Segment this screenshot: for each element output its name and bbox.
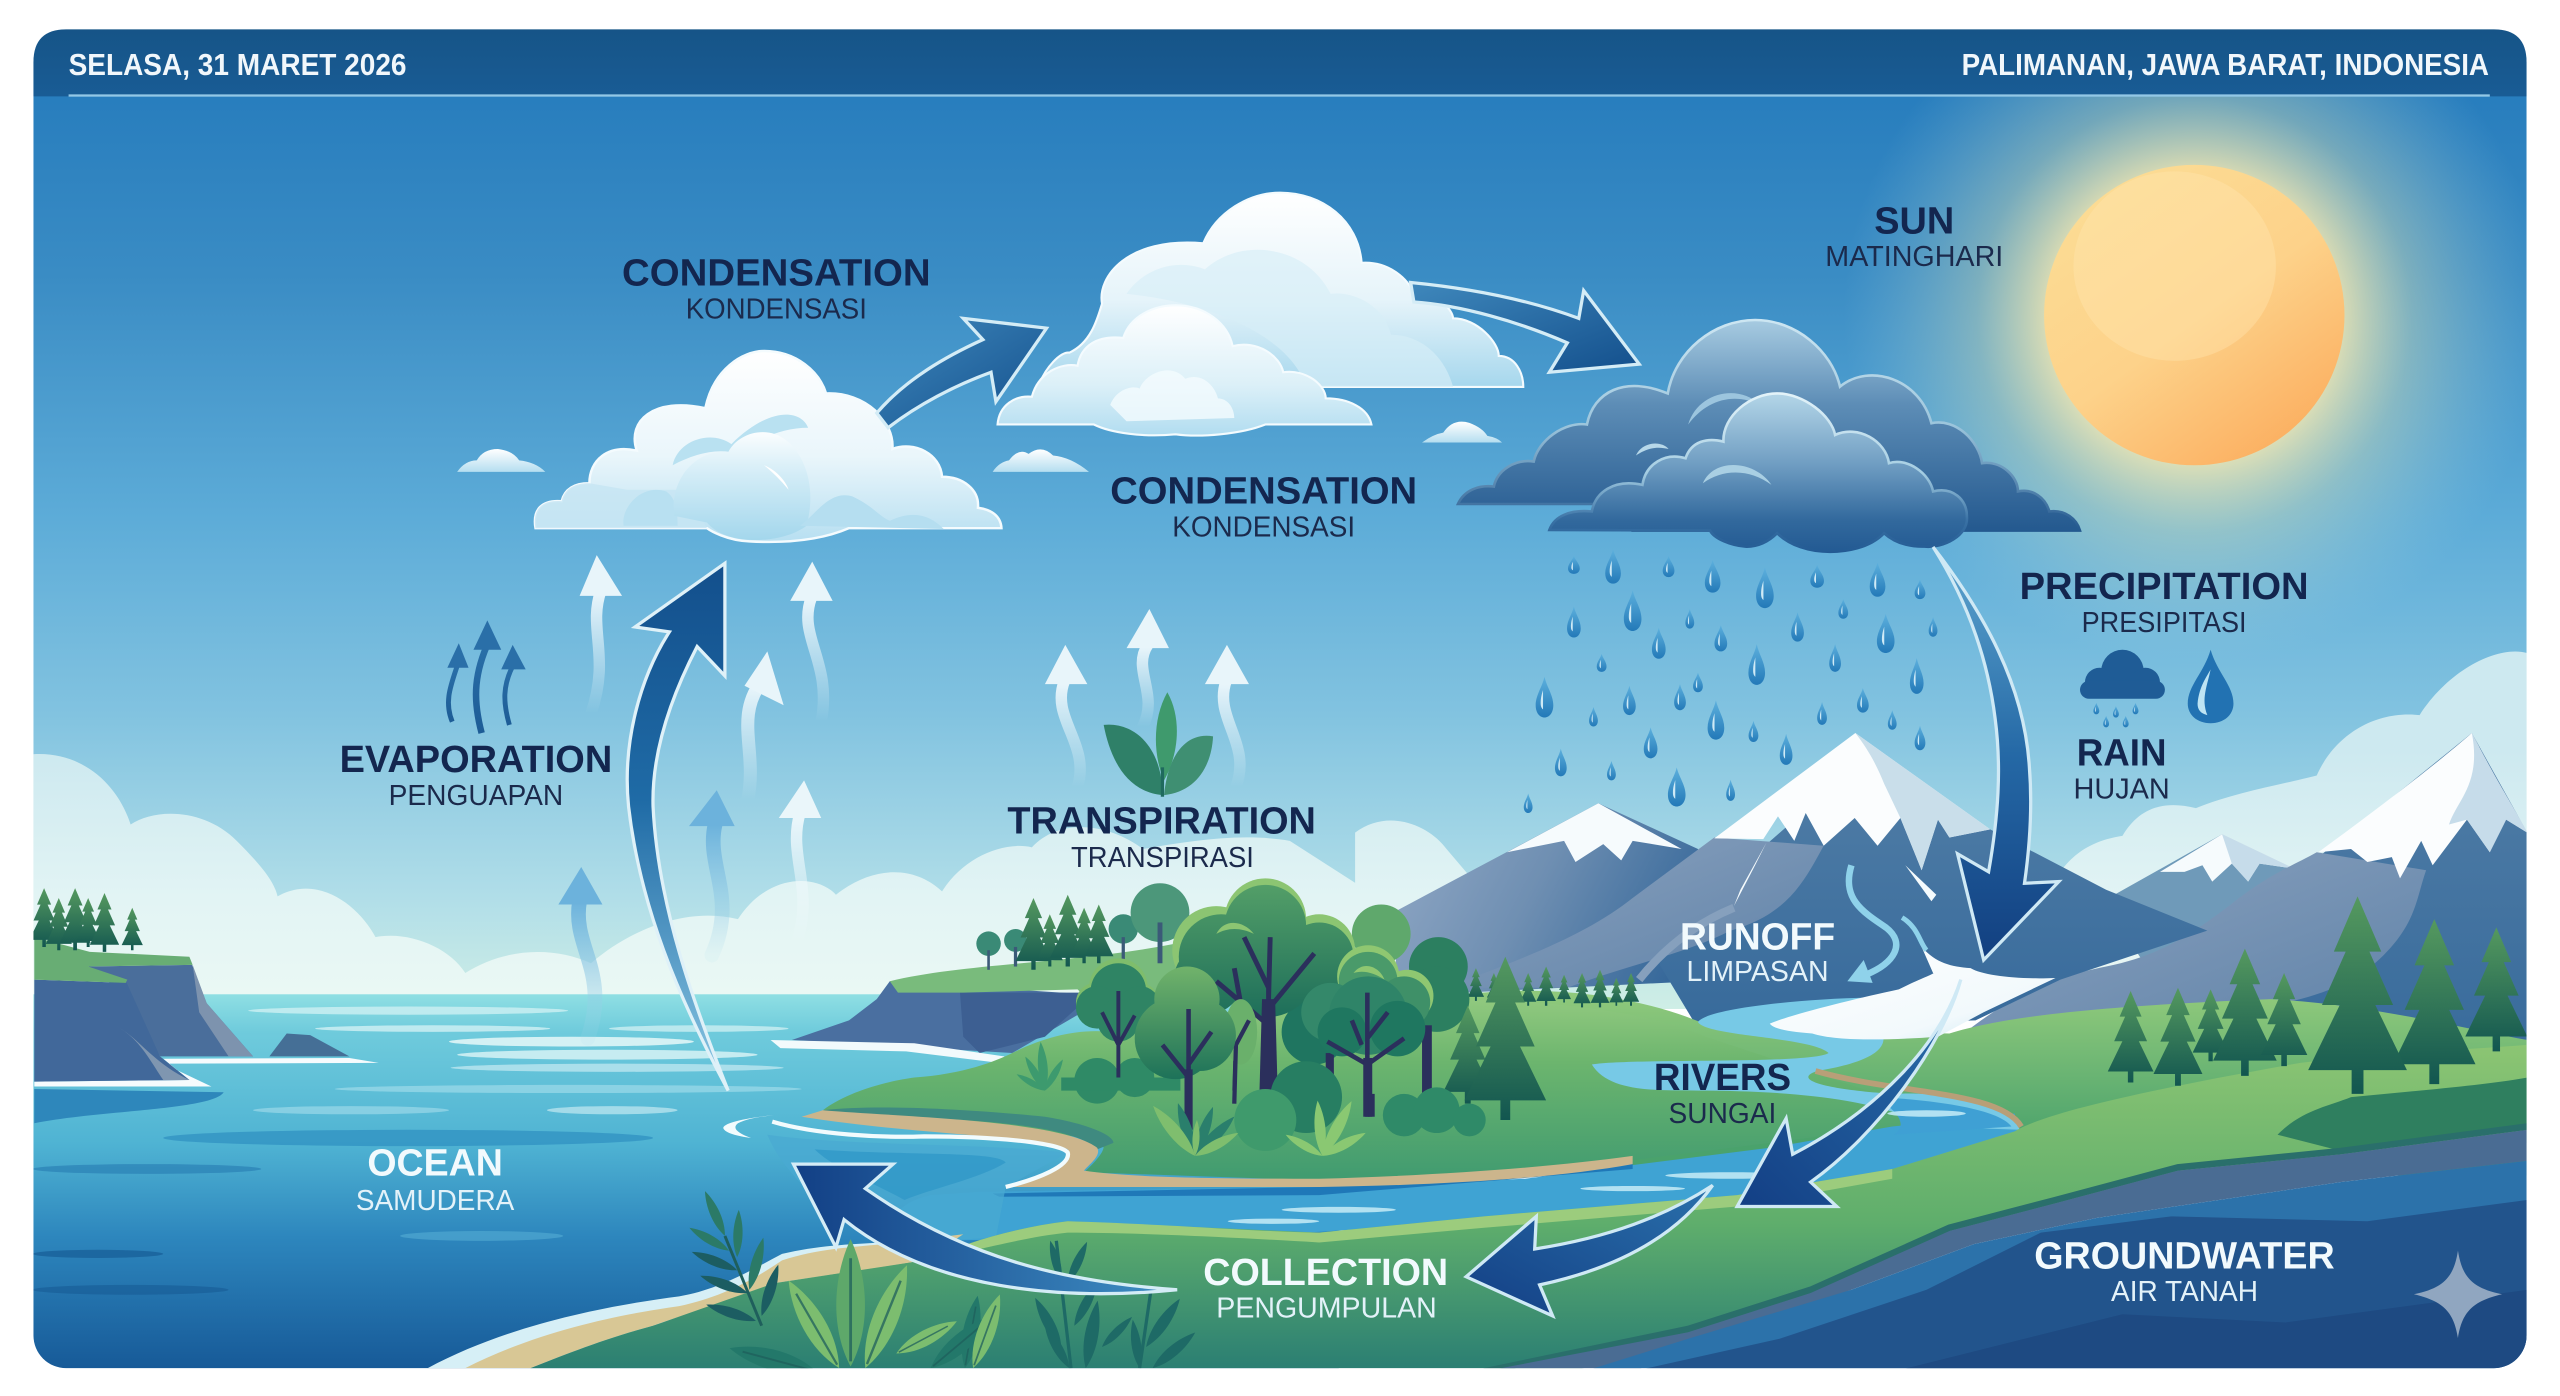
arrow: precipitation <box>1933 547 2059 960</box>
back cloud highlight arc <box>1688 393 1760 424</box>
main tree highlight <box>1216 923 1254 934</box>
label: condensation center: CONDENSATION <box>1110 470 1417 512</box>
river deep curve <box>1878 1097 2011 1135</box>
transpiration wisp right <box>1205 645 1249 787</box>
label: ocean: SAMUDERA <box>356 1184 514 1216</box>
right bottom shade <box>800 495 944 529</box>
small snow cap <box>2160 834 2294 882</box>
mountains <box>1396 733 2527 1078</box>
ocean bay near island <box>768 1135 1006 1210</box>
label: condensation center: KONDENSASI <box>1172 510 1355 542</box>
label: precipitation: PRESIPITASI <box>2082 606 2247 638</box>
left snow cap <box>1507 803 1682 862</box>
foreground sand <box>465 1234 963 1368</box>
small pine row <box>1468 965 1639 1007</box>
label: condensation center <box>1110 470 1417 542</box>
label: rain: RAIN <box>2077 732 2167 774</box>
label: rain: HUJAN <box>2073 772 2170 804</box>
label: rain <box>2073 732 2170 804</box>
icon: water drop <box>2188 650 2233 723</box>
distant clouds on the horizon <box>34 652 2526 994</box>
label: transpiration: TRANSPIRASI <box>1071 841 1254 873</box>
ocean streaks <box>33 1007 802 1295</box>
front puff <box>674 432 810 540</box>
label: evaporation: PENGUAPAN <box>389 779 563 811</box>
label: transpiration: TRANSPIRATION <box>1007 799 1316 841</box>
glacier snowmelt <box>1770 947 2056 1039</box>
sky background <box>33 29 2527 1009</box>
back puff shade <box>673 415 808 465</box>
cloud left white <box>535 351 1001 542</box>
right sprigs <box>1030 1240 1199 1372</box>
back tree canopy <box>1282 904 1469 1064</box>
header date: SELASA, 31 MARET 2026 <box>69 49 407 82</box>
cloud upper front <box>998 305 1371 436</box>
far tree row <box>976 883 1189 970</box>
icon: evaporation arrows <box>447 620 526 733</box>
small cloud right <box>1422 422 1502 442</box>
label: collection <box>1203 1251 1448 1324</box>
decorative sparkle star <box>2414 1251 2502 1338</box>
left bottom shade <box>535 483 707 528</box>
label: rivers: RIVERS <box>1654 1056 1791 1098</box>
evaporation wisp 5 <box>779 780 821 947</box>
label: transpiration <box>1007 799 1316 873</box>
label: groundwater: AIR TANAH <box>2111 1275 2258 1307</box>
bay shade <box>815 1149 1006 1200</box>
sun glow <box>1868 96 2520 624</box>
island bushes back <box>1061 1058 1180 1104</box>
transpiration wisp left <box>1045 645 1087 787</box>
label: precipitation: PRECIPITATION <box>2020 565 2309 607</box>
label: groundwater: GROUNDWATER <box>2034 1235 2335 1277</box>
island land <box>823 1012 1437 1179</box>
right pines <box>2108 896 2527 1094</box>
snow streaks <box>1734 842 1936 906</box>
sun highlight <box>2073 171 2276 361</box>
left sprig <box>687 1189 783 1326</box>
white swirl <box>723 1115 774 1138</box>
front bushes <box>1234 1061 1486 1151</box>
cloud upper back <box>1038 193 1523 387</box>
label: precipitation <box>2020 565 2309 638</box>
far shore grass <box>890 944 1176 993</box>
left cliff grass <box>34 937 193 983</box>
arrow: cloud to rain cloud <box>1411 282 1639 372</box>
arrow: river to collection <box>1466 1185 1713 1316</box>
label: condensation left: KONDENSASI <box>686 292 867 324</box>
label: evaporation <box>340 738 612 811</box>
river upper meander <box>1592 998 2020 1130</box>
evaporation wisp 1 <box>580 555 622 713</box>
arrow: runoff to river <box>1737 980 1961 1207</box>
river dark strip <box>993 1162 1633 1197</box>
left cliff shoreline <box>34 1058 379 1087</box>
dark rain cloud back <box>1458 320 2080 531</box>
foreground light bank <box>924 1169 1892 1260</box>
gray rock layer <box>1484 1130 2527 1371</box>
ocean <box>33 994 1339 1373</box>
fern center <box>1148 1101 1241 1160</box>
main mountain gray ridge left <box>1498 838 1824 988</box>
label: condensation left: CONDENSATION <box>622 252 931 294</box>
label: ocean <box>356 1142 514 1216</box>
label: ocean: OCEAN <box>367 1142 503 1184</box>
evaporation wisp 6 <box>558 867 602 1038</box>
far shore rock <box>792 981 1078 1053</box>
small cloud center <box>993 449 1089 472</box>
label: runoff <box>1680 915 1835 987</box>
sun <box>2044 165 2344 465</box>
header location: PALIMANAN, JAWA BARAT, INDONESIA <box>1962 49 2489 82</box>
icon: rain cloud <box>2080 650 2165 727</box>
left tree <box>1076 958 1161 1078</box>
sand along island <box>802 1110 1633 1187</box>
foreground land <box>531 1045 2527 1371</box>
island ferns <box>1015 1041 1368 1160</box>
label: groundwater <box>2034 1235 2335 1307</box>
rising wisps <box>558 555 1249 1038</box>
label: rivers <box>1654 1056 1791 1129</box>
label: runoff: RUNOFF <box>1680 915 1835 957</box>
fern right <box>1284 1098 1368 1160</box>
far right mountain gray ridge <box>1959 852 2426 1037</box>
arrow: evaporation upward <box>627 563 728 1091</box>
small rock <box>269 1033 349 1056</box>
label: sun: SUN <box>1874 199 1954 241</box>
far shore white line <box>770 1040 1004 1062</box>
pines near forest <box>1443 1006 1492 1104</box>
river bank brown <box>1816 1071 2021 1127</box>
river main <box>897 1113 2018 1241</box>
small tree <box>1224 999 1257 1104</box>
main tree <box>1172 878 1355 1117</box>
evaporation wisp 3 <box>744 651 784 800</box>
foreground white shore <box>428 1242 914 1368</box>
fern left <box>1015 1041 1066 1093</box>
main mountain dark body <box>1670 813 2208 1022</box>
groundwater blue layer <box>1584 1161 2527 1371</box>
label: sun <box>1825 199 2003 272</box>
darker bush on ridge <box>2278 1078 2527 1151</box>
left cliff <box>29 888 379 1087</box>
island teal band <box>823 1107 1113 1149</box>
foreground plants <box>687 1189 1199 1381</box>
label: collection: PENGUMPULAN <box>1216 1292 1437 1324</box>
small cloud left <box>457 449 545 472</box>
far right mountain dark <box>2293 733 2527 1078</box>
far right small peak <box>2116 834 2290 958</box>
left mountain <box>1396 803 1698 992</box>
river highlights <box>1228 1110 1966 1224</box>
evaporation wisp 4 <box>689 790 735 955</box>
label: runoff: LIMPASAN <box>1687 955 1829 987</box>
label: sun: MATINGHARI <box>1825 240 2003 272</box>
evaporation wisp 2 <box>790 562 833 722</box>
groundwater navy layer <box>1633 1200 2527 1371</box>
label: collection: COLLECTION <box>1203 1251 1448 1293</box>
label: evaporation: EVAPORATION <box>340 738 612 780</box>
upper cliff rock <box>88 965 253 1056</box>
left cliff pines <box>29 888 143 952</box>
large leaves <box>727 1294 999 1381</box>
label: rivers: SUNGAI <box>1669 1097 1776 1129</box>
right tree <box>1301 945 1433 1117</box>
far right snow cap <box>2318 733 2527 878</box>
arrow: collection to ocean <box>793 1164 1177 1294</box>
dark rain cloud front <box>1549 393 1967 552</box>
far shore cliff <box>770 883 1190 1062</box>
dark soil edge <box>1484 1127 2527 1371</box>
header bar <box>33 29 2527 97</box>
icon: transpiration plant <box>1104 692 1213 797</box>
arrow: cloud to cloud <box>877 318 1047 428</box>
center-left tree <box>1135 967 1236 1130</box>
forest trees <box>1061 878 1546 1151</box>
transpiration wisp center <box>1127 609 1169 727</box>
rain drops <box>1524 549 1937 813</box>
white island shoreline <box>772 1122 1068 1187</box>
main snow cap <box>1714 733 1990 870</box>
runoff small arrow <box>1847 865 1927 983</box>
meadow behind river <box>1437 991 2527 1176</box>
label: condensation left <box>622 252 931 324</box>
lower cliff rock <box>34 980 189 1082</box>
